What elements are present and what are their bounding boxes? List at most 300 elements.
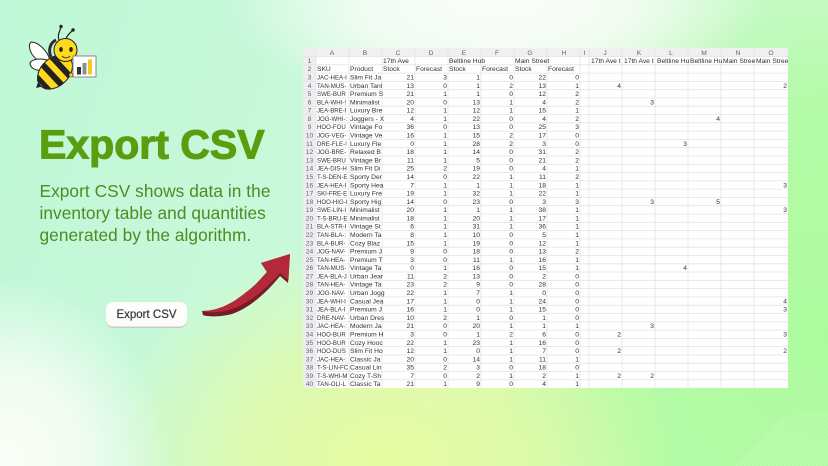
header row 2: Stock xyxy=(515,66,532,73)
data rows: 1 xyxy=(509,215,513,222)
data rows: 0 xyxy=(509,91,513,98)
bee body xyxy=(31,48,79,96)
data rows: 22 xyxy=(473,116,480,123)
data rows: 1 xyxy=(443,340,447,347)
column letters: M xyxy=(701,50,707,57)
data rows: 1 xyxy=(443,381,447,388)
data rows: 24 xyxy=(539,298,546,305)
header row 2: Product xyxy=(350,66,373,73)
data rows: 5 xyxy=(542,232,546,239)
data rows: 25 xyxy=(407,166,414,173)
data rows: 0 xyxy=(443,174,447,181)
data rows: 23 xyxy=(473,340,480,347)
data rows: 5 xyxy=(716,199,720,206)
data rows: 1 xyxy=(443,232,447,239)
data rows: Modern Ja xyxy=(350,323,382,330)
data rows: 34 xyxy=(306,332,313,338)
data rows: 18 xyxy=(306,199,313,206)
data rows: 2 xyxy=(443,315,447,322)
data rows: Slim Fit Di xyxy=(350,166,381,173)
column letters: O xyxy=(768,50,774,57)
data rows: 2 xyxy=(617,332,621,338)
data rows: 4 xyxy=(410,116,414,123)
bee head with headset xyxy=(50,25,77,62)
header row 1: 17th Ave t xyxy=(624,58,654,65)
data rows: TAN-BLA-: xyxy=(317,232,346,239)
data rows: 3 xyxy=(575,199,579,206)
data rows: 0 xyxy=(509,232,513,239)
data rows: JEA-DIS-H xyxy=(317,166,347,173)
data rows: 36 xyxy=(407,124,414,131)
data rows: 0 xyxy=(509,315,513,322)
column letters: K xyxy=(637,50,642,57)
data rows: 2 xyxy=(575,149,579,156)
data rows: SWE-BUR xyxy=(317,91,346,98)
description text: Export CSV shows data in the xyxy=(40,181,270,201)
data rows: 1 xyxy=(509,190,513,198)
data rows: 2 xyxy=(575,99,579,106)
data rows: 0 xyxy=(443,356,447,363)
data rows: 0 xyxy=(575,290,579,297)
data rows: 14 xyxy=(407,174,414,181)
data rows: JOG-WHI-: xyxy=(317,116,347,123)
data rows: 20 xyxy=(473,323,480,330)
data rows: 3 xyxy=(542,141,546,148)
data rows: 4 xyxy=(783,298,787,305)
description text: inventory table and quantities xyxy=(40,203,266,223)
data rows: HOO-HIG-I xyxy=(317,199,348,206)
spreadsheet table xyxy=(303,48,789,388)
column letters: G xyxy=(527,50,533,57)
data rows: 1 xyxy=(509,298,513,305)
data rows: Casual Lin xyxy=(350,365,382,372)
bar chart card xyxy=(69,56,96,77)
data rows: Casual Jea xyxy=(350,298,384,305)
data rows: 2 xyxy=(476,373,480,380)
data rows: Sporty Der xyxy=(350,174,383,181)
description text: generated by the algorithm. xyxy=(40,225,251,245)
data rows: 35 xyxy=(306,340,313,347)
data rows: 13 xyxy=(407,83,414,90)
data rows: 1 xyxy=(575,232,579,239)
data rows: 0 xyxy=(476,307,480,314)
data rows: 2 xyxy=(443,166,447,173)
data rows: T-S-DEN-E xyxy=(317,174,347,181)
data rows: 3 xyxy=(410,257,414,264)
data rows: 2 xyxy=(575,91,579,98)
data rows: 0 xyxy=(509,124,513,131)
data rows: 1 xyxy=(443,116,447,123)
data rows: 4 xyxy=(542,116,546,123)
data rows: 0 xyxy=(509,282,513,289)
data rows: 2 xyxy=(617,373,621,380)
data rows: 20 xyxy=(407,99,414,106)
data rows: TAN-HEA- xyxy=(317,257,345,264)
data rows: Slim Fit Ho xyxy=(350,348,383,355)
data rows: 20 xyxy=(407,207,414,214)
data rows: Vintage St xyxy=(350,224,381,231)
data rows: 1 xyxy=(575,207,579,214)
data rows: 1 xyxy=(542,323,546,330)
data rows: 21 xyxy=(407,323,414,330)
data rows: 19 xyxy=(473,166,480,173)
data rows: Minimalist xyxy=(350,215,380,222)
data rows: 14 xyxy=(473,149,480,156)
data rows: 0 xyxy=(575,307,579,314)
data rows: 18 xyxy=(407,215,414,222)
data rows: Urban Jogg xyxy=(350,290,385,297)
data rows: 12 xyxy=(306,149,313,156)
data rows: 12 xyxy=(473,108,480,115)
data rows: 18 xyxy=(407,149,414,156)
data rows: 25 xyxy=(539,124,546,131)
data rows: 0 xyxy=(443,124,447,131)
data rows: 3 xyxy=(783,207,787,214)
data rows: Premium H xyxy=(350,332,384,338)
header row 2: Forecast xyxy=(482,66,508,73)
data rows: 14 xyxy=(473,356,480,363)
column letters: F xyxy=(495,50,499,57)
data rows: Vintage Fo xyxy=(350,124,383,131)
data rows: JOG-VEG- xyxy=(317,132,346,140)
column letters: N xyxy=(736,50,741,57)
data rows: 1 xyxy=(509,307,513,314)
data rows: 0 xyxy=(509,149,513,156)
data rows: TAN-HEA- xyxy=(317,282,345,289)
data rows: 16 xyxy=(407,132,414,140)
data rows: Premium T xyxy=(350,257,383,264)
data rows: 0 xyxy=(509,365,513,372)
data rows: 1 xyxy=(509,373,513,380)
data rows: 12 xyxy=(539,240,546,247)
data rows: SKI-FRE-E xyxy=(317,190,347,198)
data rows: 3 xyxy=(410,332,414,338)
data rows: 1 xyxy=(443,149,447,156)
data rows: 3 xyxy=(650,323,654,330)
data rows: 0 xyxy=(575,340,579,347)
data rows: 1 xyxy=(575,373,579,380)
data rows: 19 xyxy=(407,190,414,198)
data rows: 1 xyxy=(509,323,513,330)
data rows: 2 xyxy=(783,348,787,355)
data rows: 14 xyxy=(306,166,313,173)
data rows: Luxury Fre xyxy=(350,190,382,198)
data rows: 0 xyxy=(410,141,414,148)
data rows: Luxury Bre xyxy=(350,108,383,115)
data rows: 1 xyxy=(575,265,579,272)
data rows: 3 xyxy=(476,365,480,372)
data rows: HOO-BUR xyxy=(317,340,346,347)
data rows: 31 xyxy=(473,224,480,231)
title: Export CSV xyxy=(39,122,265,168)
data rows: Joggers - X xyxy=(350,116,385,123)
data rows: 36 xyxy=(306,348,313,355)
data rows: Classic Ta xyxy=(350,381,381,388)
header row 1: 1 xyxy=(308,58,312,65)
data rows: 0 xyxy=(443,199,447,206)
data rows: 1 xyxy=(575,356,579,363)
data rows: BLA-BUR- xyxy=(317,240,345,247)
data rows: 22 xyxy=(473,174,480,181)
data rows: Cozy T-Sh xyxy=(350,373,381,380)
data rows: 7 xyxy=(476,290,480,297)
data rows: 1 xyxy=(575,190,579,198)
dotted corner pattern xyxy=(734,409,828,466)
data rows: 1 xyxy=(443,290,447,297)
data rows: 1 xyxy=(575,323,579,330)
data rows: DRE-NAV- xyxy=(317,315,346,322)
data rows: 5 xyxy=(308,91,312,98)
data rows: 2 xyxy=(783,83,787,90)
data rows: 9 xyxy=(476,381,480,388)
data rows: 16 xyxy=(539,257,546,264)
data rows: 0 xyxy=(575,332,579,338)
column letters: C xyxy=(396,50,401,57)
header row 2 xyxy=(308,66,574,73)
data rows: 32 xyxy=(473,190,480,198)
data rows: 0 xyxy=(443,83,447,90)
data rows: 15 xyxy=(407,240,414,247)
data rows: 23 xyxy=(306,240,313,247)
data rows: 22 xyxy=(539,74,546,82)
data rows: 2 xyxy=(509,141,513,148)
data rows: 21 xyxy=(407,91,414,98)
column letters: B xyxy=(363,50,368,57)
data rows: 1 xyxy=(443,182,447,189)
data rows: SWE-LIN-I xyxy=(317,207,346,214)
data rows: 1 xyxy=(476,91,480,98)
data rows: 15 xyxy=(306,174,313,181)
data rows: 15 xyxy=(539,265,546,272)
data rows: 4 xyxy=(542,166,546,173)
data rows xyxy=(306,74,787,388)
header row 1: Beltline Hu xyxy=(657,58,690,65)
data rows: 1 xyxy=(509,207,513,214)
data rows: 8 xyxy=(410,232,414,239)
data rows: 0 xyxy=(575,141,579,148)
data rows: 31 xyxy=(306,307,313,314)
data rows: 1 xyxy=(443,190,447,198)
data rows: 1 xyxy=(509,340,513,347)
data rows: 10 xyxy=(473,232,480,239)
header row 2: Stock xyxy=(449,66,466,73)
data rows: 4 xyxy=(617,83,621,90)
data rows: 3 xyxy=(542,199,546,206)
data rows: JOG-NAV- xyxy=(317,290,345,297)
data rows: Urban Tanl xyxy=(350,83,383,90)
data rows: 21 xyxy=(539,157,546,164)
column letters: J xyxy=(603,50,607,57)
data rows: 39 xyxy=(306,373,313,380)
data rows: 6 xyxy=(410,224,414,231)
data rows: Classic Ja xyxy=(350,356,381,363)
data rows: 11 xyxy=(539,356,546,363)
data rows: 37 xyxy=(306,356,313,363)
data rows: 1 xyxy=(509,108,513,115)
data rows: 18 xyxy=(539,182,546,189)
data rows: 1 xyxy=(443,215,447,222)
data rows: 28 xyxy=(473,141,480,148)
data rows: Urban Dres xyxy=(350,315,385,322)
data rows: 18 xyxy=(473,249,480,256)
data rows: 0 xyxy=(575,74,579,82)
data rows: 10 xyxy=(306,132,313,140)
column letters: E xyxy=(462,50,467,57)
data rows: 1 xyxy=(443,348,447,355)
data rows: 10 xyxy=(407,315,414,322)
data rows: 31 xyxy=(539,149,546,156)
column letters: A xyxy=(330,50,335,57)
data rows: 4 xyxy=(683,265,687,272)
description text xyxy=(40,181,270,245)
data rows: 0 xyxy=(443,332,447,338)
data rows: 3 xyxy=(783,182,787,189)
data rows: 1 xyxy=(509,290,513,297)
data rows: 21 xyxy=(407,381,414,388)
column letters: D xyxy=(429,50,434,57)
data rows: 15 xyxy=(539,307,546,314)
data rows: Urban Jear xyxy=(350,273,384,280)
data rows: 7 xyxy=(308,108,312,115)
data rows: 22 xyxy=(407,290,414,297)
data rows: 0 xyxy=(509,199,513,206)
data rows: JEA-BLA-J xyxy=(317,273,347,280)
data rows: 33 xyxy=(306,323,313,330)
data rows: JAC-HEA-: xyxy=(317,356,347,363)
data rows: 0 xyxy=(575,273,579,280)
data rows: 1 xyxy=(575,381,579,388)
data rows: 36 xyxy=(539,224,546,231)
button: export csv: Export CSV xyxy=(116,309,177,321)
data rows: JEA-BRE-I xyxy=(317,108,347,115)
bee mascot icon xyxy=(29,25,96,96)
data rows: Sporty Hig xyxy=(350,199,382,206)
data rows: 1 xyxy=(575,182,579,189)
header row 1: Main Stree xyxy=(723,58,756,65)
data rows: BLA-STR-I xyxy=(317,224,347,231)
data rows: 0 xyxy=(443,99,447,106)
data rows: 2 xyxy=(443,282,447,289)
header row 1: 17th Ave xyxy=(383,58,409,65)
data rows: 11 xyxy=(407,157,414,164)
data rows: 2 xyxy=(617,348,621,355)
data rows: T-S-BRU-E xyxy=(317,215,347,222)
data rows: 23 xyxy=(407,282,414,289)
data rows: DRE-FLE-! xyxy=(317,141,347,148)
data rows: TAN-MUS- xyxy=(317,83,346,90)
data rows: BLA-WHI-! xyxy=(317,99,346,106)
data rows: HOO-DUS xyxy=(317,348,346,355)
data rows: 11 xyxy=(539,174,546,181)
data rows: 0 xyxy=(443,373,447,380)
data rows: 13 xyxy=(473,124,480,131)
data rows: 1 xyxy=(443,157,447,164)
data rows: 1 xyxy=(476,207,480,214)
data rows: 0 xyxy=(509,273,513,280)
data rows: 3 xyxy=(308,74,312,82)
data rows: 2 xyxy=(509,332,513,338)
column letters: L xyxy=(669,50,673,57)
data rows: 2 xyxy=(443,365,447,372)
data rows: 14 xyxy=(407,199,414,206)
header row 1: Main Stree xyxy=(756,58,789,65)
data rows: 18 xyxy=(539,365,546,372)
data rows: 1 xyxy=(509,348,513,355)
data rows: 19 xyxy=(306,207,313,214)
data rows: 40 xyxy=(306,381,313,388)
header row 1 xyxy=(308,58,789,65)
data rows: T-S-WHI-M xyxy=(317,373,347,380)
data rows: 6 xyxy=(542,332,546,338)
data rows: 9 xyxy=(476,282,480,289)
data rows: 1 xyxy=(443,108,447,115)
data rows: 5 xyxy=(476,157,480,164)
data rows: 0 xyxy=(575,282,579,289)
data rows: 1 xyxy=(443,132,447,140)
data rows: 1 xyxy=(443,224,447,231)
data rows: 0 xyxy=(575,315,579,322)
data rows: 2 xyxy=(443,273,447,280)
data rows: 6 xyxy=(308,99,312,106)
header row 1: Beltline Hu xyxy=(690,58,723,65)
data rows: 1 xyxy=(443,91,447,98)
data rows: HOO-FOU xyxy=(317,124,346,131)
data rows: 2 xyxy=(509,83,513,90)
data rows: 1 xyxy=(443,298,447,305)
data rows: 28 xyxy=(539,282,546,289)
header row 2: SKU xyxy=(317,66,331,73)
data rows: Premium J xyxy=(350,307,382,314)
data rows: 0 xyxy=(575,298,579,305)
data rows: 13 xyxy=(473,99,480,106)
data rows: 1 xyxy=(575,83,579,90)
data rows: 7 xyxy=(410,182,414,189)
data rows: 1 xyxy=(575,215,579,222)
data rows: 30 xyxy=(306,298,313,305)
data rows: 0 xyxy=(410,265,414,272)
data rows: 7 xyxy=(410,373,414,380)
data rows: 0 xyxy=(509,116,513,123)
data rows: 2 xyxy=(575,157,579,164)
data rows: 1 xyxy=(443,265,447,272)
data rows: T-S-LIN-FC xyxy=(317,365,349,372)
data rows: 7 xyxy=(542,348,546,355)
data rows: 25 xyxy=(306,257,313,264)
data rows: 3 xyxy=(575,124,579,131)
data rows: SWE-BRU xyxy=(317,157,346,164)
data rows: Slim Fit Ja xyxy=(350,74,381,82)
data rows: 2 xyxy=(542,273,546,280)
data rows: 1 xyxy=(443,141,447,148)
data rows: 11 xyxy=(407,273,414,280)
data rows: Relaxed B xyxy=(350,149,381,156)
sheet background xyxy=(303,48,788,388)
data rows: JEA-BLA-I xyxy=(317,307,346,314)
data rows: 1 xyxy=(476,315,480,322)
data rows: 1 xyxy=(509,356,513,363)
data rows: 0 xyxy=(575,365,579,372)
data rows: 15 xyxy=(539,108,546,115)
data rows: 9 xyxy=(410,249,414,256)
data rows: 1 xyxy=(476,83,480,90)
data rows: 3 xyxy=(650,199,654,206)
data rows: Cozy Blaz xyxy=(350,240,381,247)
data rows: 3 xyxy=(683,141,687,148)
header row 2: Forecast xyxy=(416,66,442,73)
data rows: 32 xyxy=(306,315,313,322)
header row 1: Beltline Hub xyxy=(449,58,485,65)
data rows: 3 xyxy=(783,332,787,338)
